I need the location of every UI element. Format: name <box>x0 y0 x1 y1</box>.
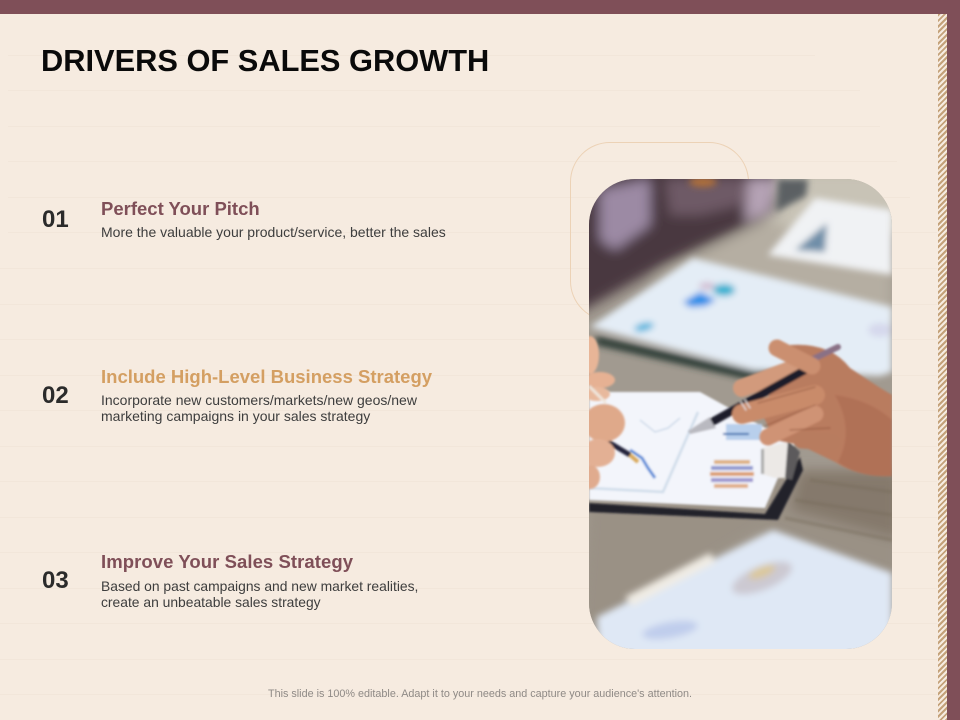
description 03: create an unbeatable sales strategy <box>101 594 321 610</box>
number 01: 01 <box>42 206 69 233</box>
right bar <box>947 0 960 720</box>
item 01 <box>42 198 446 240</box>
description 02: marketing campaigns in your sales strategy <box>101 408 370 424</box>
description 01: More the valuable your product/service, better the sales <box>101 224 446 240</box>
item 02 <box>42 366 432 424</box>
hatched strip <box>938 14 947 720</box>
description 03: Based on past campaigns and new market realities, <box>101 578 418 594</box>
heading: Improve Your Sales Strategy: Improve Your Sales Strategy <box>101 551 353 572</box>
title: DRIVERS OF SALES GROWTH <box>41 43 489 78</box>
top bar <box>0 0 960 14</box>
description 02: Incorporate new customers/markets/new geos/new <box>101 392 417 408</box>
description 03 <box>101 578 418 610</box>
lower document on clipboard <box>589 392 892 540</box>
blurred background: person, table, tablet <box>589 179 892 626</box>
left hand and pencil <box>580 336 638 489</box>
number 03: 03 <box>42 567 69 594</box>
decorative rounded outline behind photo <box>570 142 749 321</box>
upper document with pie chart <box>590 258 892 381</box>
item 03 <box>42 551 418 610</box>
heading: Perfect Your Pitch: Perfect Your Pitch <box>101 198 260 219</box>
right hand and pen <box>688 345 892 476</box>
footer note: This slide is 100% editable. Adapt it to your needs and capture your audience's attention. <box>268 688 692 700</box>
number 02: 02 <box>42 382 69 409</box>
photo: business hands over charts <box>589 179 892 649</box>
heading: Include High-Level Business Strategy: Include High-Level Business Strategy <box>101 366 432 387</box>
description 02 <box>101 392 417 424</box>
